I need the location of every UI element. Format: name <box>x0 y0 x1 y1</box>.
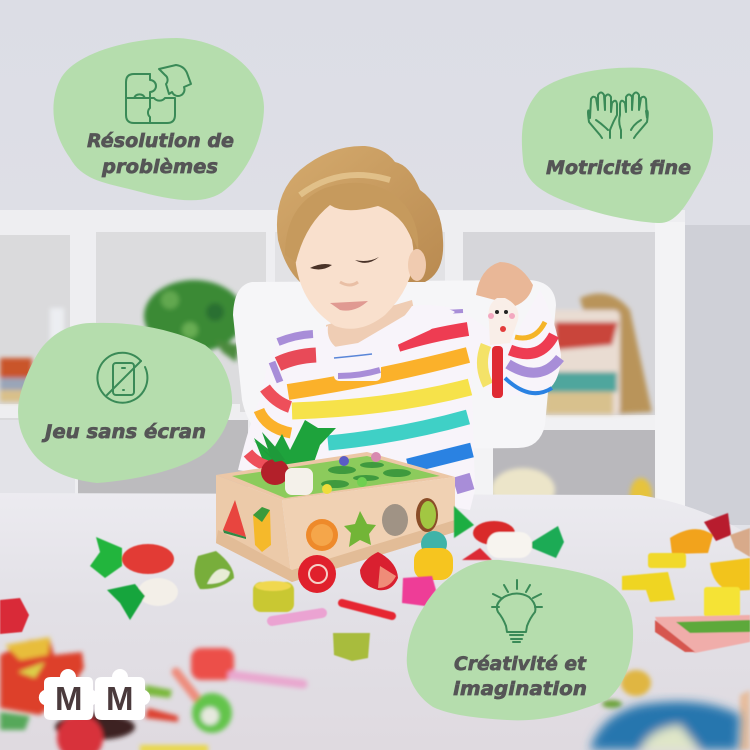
red worm <box>342 603 392 616</box>
red hammer left <box>0 598 29 634</box>
hair fringe <box>285 183 418 262</box>
box top <box>216 452 455 500</box>
panel: screen-free play <box>18 323 232 483</box>
far right toys <box>670 529 713 554</box>
child <box>238 146 561 510</box>
hand <box>476 262 533 306</box>
box front left <box>216 475 292 582</box>
pomegranate <box>360 552 398 590</box>
left white carrot <box>138 578 178 606</box>
chair <box>233 280 556 515</box>
sweater <box>238 290 561 510</box>
heading: Jeu sans écran <box>41 421 206 443</box>
panel: problem solving <box>53 38 264 200</box>
collar <box>313 305 455 358</box>
heading line 2: problèmes <box>101 156 218 178</box>
heading: Créativité et <box>454 653 587 675</box>
stick toy <box>191 648 234 680</box>
logo letter 2: M <box>106 680 134 717</box>
hair back <box>277 146 443 282</box>
icon: light bulb <box>492 580 542 642</box>
heading: Motricité fine <box>546 157 691 179</box>
yellow cylinder <box>253 582 294 612</box>
ear <box>408 249 426 281</box>
eyes <box>310 264 332 269</box>
beads <box>339 456 349 466</box>
carrot greens back <box>254 420 336 468</box>
mouth <box>330 301 368 311</box>
orange <box>306 519 338 551</box>
carrot right <box>454 506 474 538</box>
heading line 2: imagination <box>453 678 587 700</box>
icon: puzzle <box>126 65 191 123</box>
radish <box>261 459 289 485</box>
logo letter: M <box>55 680 82 717</box>
table toys <box>0 506 750 661</box>
face <box>294 200 413 329</box>
blurred foreground toys <box>0 637 750 750</box>
bottom-left fruit tray <box>55 714 135 740</box>
green wedge <box>333 633 370 661</box>
red wheel <box>298 555 336 593</box>
icon: no phone <box>97 353 147 403</box>
logo: puzzle M M <box>39 669 150 720</box>
toy box <box>216 420 455 593</box>
box front right <box>282 477 455 582</box>
white carrot right <box>487 532 532 558</box>
icon: hands <box>588 92 648 138</box>
pink worm <box>272 613 322 621</box>
teal piece and banana <box>421 531 447 557</box>
shelf objects <box>0 280 652 512</box>
hole <box>382 504 408 536</box>
collar tab <box>334 354 381 381</box>
white carrot <box>285 468 313 495</box>
blurred blue toy <box>590 702 740 750</box>
kiwi <box>416 498 438 532</box>
toy bunny and worm <box>488 298 518 398</box>
watermelon <box>223 500 246 537</box>
pink cube <box>402 576 436 606</box>
panel: fine motor skills <box>522 68 713 223</box>
pear <box>194 551 234 589</box>
star <box>344 511 376 547</box>
pineapple <box>253 510 271 552</box>
panel: creativity <box>407 560 633 720</box>
heading: Résolution de <box>87 130 234 152</box>
neck <box>326 300 414 348</box>
left carrot <box>90 537 122 578</box>
nose <box>340 282 358 285</box>
table <box>0 493 750 750</box>
round toy <box>621 670 651 696</box>
